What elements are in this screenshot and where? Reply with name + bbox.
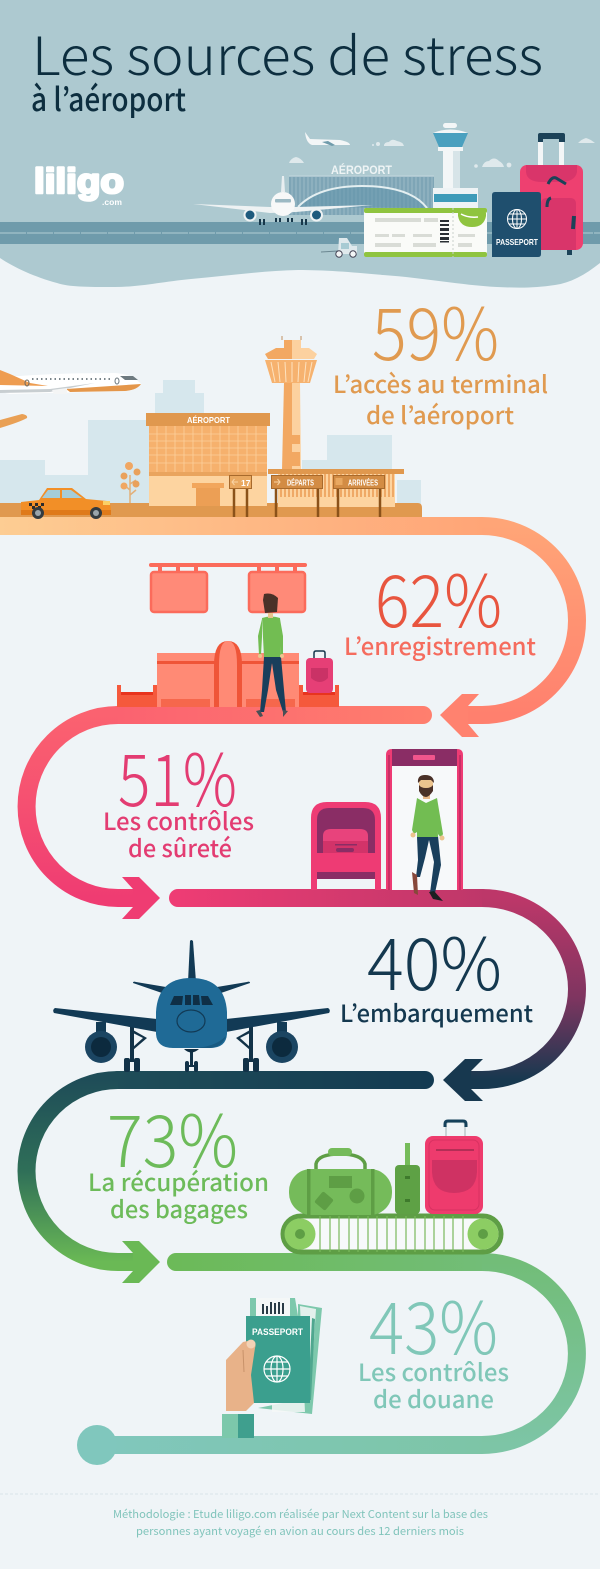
wings: [53, 1008, 330, 1034]
stat: 73% baggage claim: [88, 1083, 269, 1225]
city skyline: [0, 380, 421, 505]
stat: 40% boarding: L’embarquement: [340, 994, 533, 1029]
sign: gate 17: 17: [241, 478, 251, 488]
illustration: security gate: [311, 749, 463, 901]
baggage scanner: [311, 802, 381, 890]
stat: 51% security: [103, 722, 254, 864]
subtitle: à l’aéroport: [31, 75, 186, 121]
arrow: toward security: [122, 877, 160, 919]
icon: small plane in sky: [305, 132, 350, 146]
sign: gate 17: [230, 476, 252, 517]
hand: [226, 1340, 256, 1411]
stat: 73% baggage claim: La récupération: [88, 1163, 269, 1198]
counter: [157, 641, 299, 707]
icon: large plane on runway: [193, 176, 373, 225]
icon: passport: PASSEPORT: [496, 237, 539, 247]
ground strip: [0, 503, 422, 517]
stat: 40% boarding: [340, 906, 533, 1029]
icon: terminal building: [146, 413, 270, 506]
arrow: toward baggage: [122, 1241, 160, 1283]
small suitcase: [306, 651, 333, 693]
icon: low departures building: [268, 469, 404, 507]
fuselage: [156, 978, 227, 1052]
winding path: [0, 526, 577, 1445]
control tower: [433, 123, 478, 215]
icon: terminal building: AÉROPORT: [187, 415, 231, 425]
path end dot: [77, 1425, 117, 1465]
passport cover: PASSEPORT: [252, 1327, 303, 1338]
footer dashed divider: [0, 1493, 600, 1495]
man from behind: [256, 594, 288, 717]
illustration: check-in desk: [117, 563, 339, 717]
arrow: after check-in path: [440, 694, 479, 737]
header panel: [0, 0, 600, 288]
stat: 59% terminal access: [333, 276, 548, 431]
arrow: toward boarding: [443, 1059, 483, 1101]
sign: departures: DÉPARTS: [287, 478, 314, 488]
side belts: [117, 685, 339, 707]
illustration: airplane front view: [53, 940, 330, 1072]
sign: departures: [272, 476, 322, 517]
methodology note: personnes ayant voyagé en avion au cours des 12 derniers mois: [136, 1523, 464, 1539]
icon: plane taking off: [0, 370, 141, 428]
stat: 40% boarding: 40%: [367, 906, 502, 1011]
cuff: [222, 1414, 254, 1438]
conveyor belt: [283, 1216, 501, 1252]
stat: 43% customs: de douane: [373, 1380, 494, 1415]
red suitcase: [425, 1121, 483, 1214]
stat: 59% terminal access: L’accès au terminal: [333, 365, 548, 400]
tickets behind passport: [250, 1298, 322, 1414]
methodology note: Méthodologie : Etude liligo.com réalisée par Next Content sur la base des: [113, 1506, 488, 1522]
sign: arrivals: ARRIVÉES: [348, 478, 378, 488]
stat: 62% check-in: 62%: [375, 543, 502, 648]
hanging signs: [149, 563, 307, 612]
stat: 43% customs: 43%: [369, 1270, 498, 1375]
illustration: airport scene: [0, 336, 422, 519]
duffel bag: [289, 1148, 392, 1215]
icon: orange control tower: [265, 336, 317, 470]
stat: 51% security: Les contrôles: [103, 802, 254, 837]
stat: 51% security: 51%: [118, 722, 237, 827]
stat: 59% terminal access: de l’aéroport: [366, 396, 514, 431]
metal detector gate: [386, 749, 463, 890]
landing gear: [124, 1027, 259, 1072]
stat: 51% security: de sûreté: [128, 829, 232, 864]
stat: 73% baggage claim: des bagages: [110, 1190, 248, 1225]
runway: [0, 222, 600, 244]
bearded man walking: [410, 775, 444, 901]
logo: liligo: .com: [102, 197, 122, 207]
title: Les sources de stress: [32, 15, 543, 91]
airport terminal: [289, 164, 434, 215]
icon: tree: [120, 462, 140, 503]
stat: 59% terminal access: 59%: [372, 276, 499, 381]
stat: 43% customs: Les contrôles: [358, 1353, 509, 1388]
stat: 73% baggage claim: 73%: [107, 1083, 238, 1188]
illustration: baggage carousel: [283, 1121, 501, 1252]
small green case: [395, 1143, 420, 1214]
icon: passport: [492, 192, 541, 257]
icon: pink suitcase: [520, 133, 583, 255]
sign: arrivals: [334, 476, 384, 517]
stat: 62% check-in: L’enregistrement: [344, 627, 536, 662]
stat: 43% customs: [358, 1270, 509, 1415]
methodology note: [113, 1506, 488, 1539]
airport terminal: AÉROPORT: [331, 164, 392, 177]
engines: [85, 1031, 298, 1063]
clouds: [289, 138, 595, 168]
logo: liligo: liligo: [34, 162, 124, 201]
icon: airport cart: [321, 238, 357, 257]
icon: taxi: [21, 488, 111, 519]
tail and stabilizers: [133, 940, 250, 993]
stat: 62% check-in: [344, 543, 536, 662]
illustration: hand holding passport: [222, 1298, 322, 1438]
icon: boarding pass: [364, 208, 487, 257]
